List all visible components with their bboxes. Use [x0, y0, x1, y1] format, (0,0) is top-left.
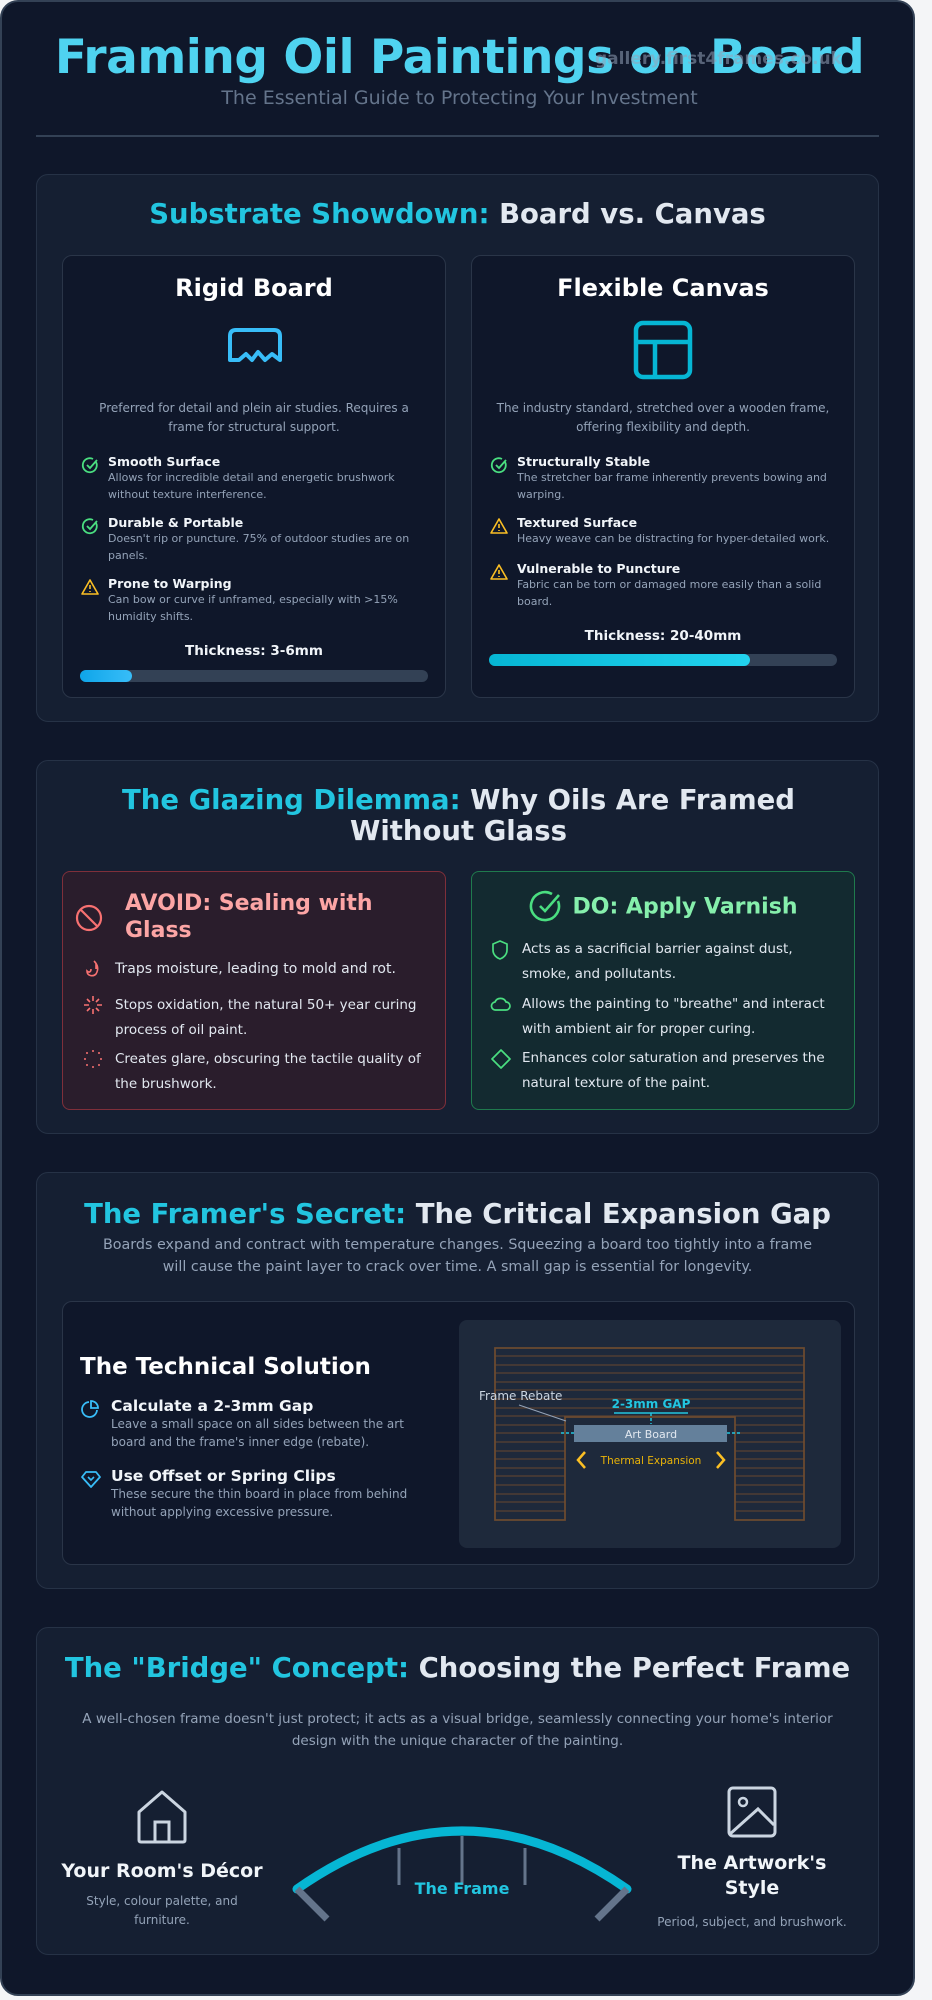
do item 1: Acts as a sacrificial barrier against dust, smoke, and pollutants.: [522, 941, 793, 982]
do item 2: Allows the painting to "breathe" and interact with ambient air for proper curing.: [522, 996, 825, 1037]
description: The industry standard, stretched over a wooden frame, offering flexibility and depth.: [497, 401, 829, 434]
subtitle: The Essential Guide to Protecting Your Investment: [221, 87, 698, 109]
right: artwork style: [657, 1786, 847, 1929]
bar: [489, 654, 837, 666]
item: warping: Can bow or curve if unframed, especially with >15% humidity shifts.: [108, 593, 398, 623]
right: artwork style: The Artwork's Style: [678, 1852, 826, 1899]
bridge arc: the frame: [292, 1826, 632, 1922]
description: A well-chosen frame doesn't just protect; it acts as a visual bridge, seamlessly connecting your home's interior design with the unique character of the painting.: [82, 1711, 833, 1749]
item: clips: Use Offset or Spring Clips: [111, 1467, 336, 1485]
item: warping: Prone to Warping: [108, 576, 232, 591]
avoid item 3: Creates glare, obscuring the tactile quality of the brushwork.: [115, 1051, 421, 1092]
item: warping: [81, 576, 398, 623]
item: smooth: [82, 454, 395, 501]
item: clips: These secure the thin board in place from behind without applying excessive pressure.: [111, 1487, 407, 1519]
item: clips: [81, 1467, 407, 1519]
item: durable: [82, 515, 409, 562]
panel: glazing dilemma: [36, 760, 879, 1134]
card title: Rigid Board: [175, 274, 333, 302]
diagram: expansion gap: Thermal Expansion: [600, 1455, 701, 1467]
avoid heading: AVOID: Sealing with Glass: [125, 891, 373, 943]
item: gap: Leave a small space on all sides between the art board and the frame's inner edge (rebate).: [111, 1417, 404, 1449]
do heading: [530, 890, 797, 922]
title: Framing Oil Paintings on Board: [55, 30, 864, 85]
item: puncture: Fabric can be torn or damaged more easily than a solid board.: [517, 578, 821, 608]
heading: The Glazing Dilemma: Why Oils Are Framed Without Glass: [122, 784, 795, 847]
diagram: expansion gap: [459, 1320, 841, 1548]
heading: The "Bridge" Concept: Choosing the Perfect Frame: [65, 1652, 850, 1684]
item: puncture: Vulnerable to Puncture: [517, 561, 680, 576]
left: room decor: Your Room's Décor: [61, 1860, 263, 1882]
card: rigid board: [62, 255, 446, 698]
watermark: gallery.first4frames.co.uk: [595, 49, 842, 69]
description: Boards expand and contract with temperature changes. Squeezing a board too tightly into a frame will cause the paint layer to crack over time. A small gap is essential for longevity.: [103, 1237, 812, 1275]
diagram: expansion gap: Art Board: [625, 1428, 677, 1441]
avoid item 1: Traps moisture, leading to mold and rot.: [115, 961, 396, 977]
inner solution box: [62, 1301, 855, 1565]
description: Preferred for detail and plein air studies. Requires a frame for structural support.: [99, 401, 409, 434]
bar: [80, 670, 428, 682]
item: stable: [490, 454, 827, 501]
item: gap: [81, 1397, 404, 1449]
card title: Flexible Canvas: [557, 274, 769, 302]
item: gap: Calculate a 2-3mm Gap: [111, 1397, 313, 1415]
card: flexible canvas: [471, 255, 855, 698]
icon: board: [228, 328, 282, 362]
icon: image: [728, 1786, 776, 1838]
item: textured: [490, 515, 829, 545]
item: puncture: [490, 561, 821, 608]
left: room decor: [61, 1790, 263, 1927]
do item 3: Enhances color saturation and preserves the natural texture of the paint.: [522, 1050, 825, 1091]
thickness label: Thickness: 3-6mm: [185, 643, 323, 659]
panel: substrate showdown: [36, 174, 879, 722]
item: smooth: Allows for incredible detail and energetic brushwork without texture interference.: [108, 471, 395, 501]
item: textured: Textured Surface: [517, 515, 637, 530]
item: durable: Durable & Portable: [108, 515, 243, 530]
solution title: The Technical Solution: [80, 1354, 371, 1380]
panel: expansion gap: [36, 1172, 879, 1589]
avoid box: [62, 871, 446, 1110]
thickness label: Thickness: 20-40mm: [585, 628, 741, 644]
avoid item 2: Stops oxidation, the natural 50+ year curing process of oil paint.: [115, 997, 416, 1038]
item: smooth: Smooth Surface: [108, 454, 220, 469]
do heading: DO: Apply Varnish: [573, 894, 797, 920]
icon: canvas: [634, 320, 692, 380]
right: artwork style: Period, subject, and brushwork.: [657, 1915, 847, 1929]
item: stable: Structurally Stable: [517, 454, 650, 469]
diagram: expansion gap: 2-3mm GAP: [612, 1397, 691, 1411]
labels: Frame Rebate: [479, 1389, 562, 1403]
left: room decor: Style, colour palette, and furniture.: [86, 1894, 238, 1927]
do box: [471, 871, 855, 1110]
panel: bridge concept: [36, 1627, 879, 1955]
item: textured: Heavy weave can be distracting for hyper-detailed work.: [517, 532, 829, 545]
icon: house: [138, 1790, 186, 1844]
item: durable: Doesn't rip or puncture. 75% of outdoor studies are on panels.: [108, 532, 409, 562]
heading: The Framer's Secret: The Critical Expansion Gap: [84, 1198, 831, 1230]
heading: Substrate Showdown: Board vs. Canvas: [149, 198, 766, 230]
item: stable: The stretcher bar frame inherently prevents bowing and warping.: [517, 471, 827, 501]
bridge arc: the frame: The Frame: [415, 1879, 510, 1898]
